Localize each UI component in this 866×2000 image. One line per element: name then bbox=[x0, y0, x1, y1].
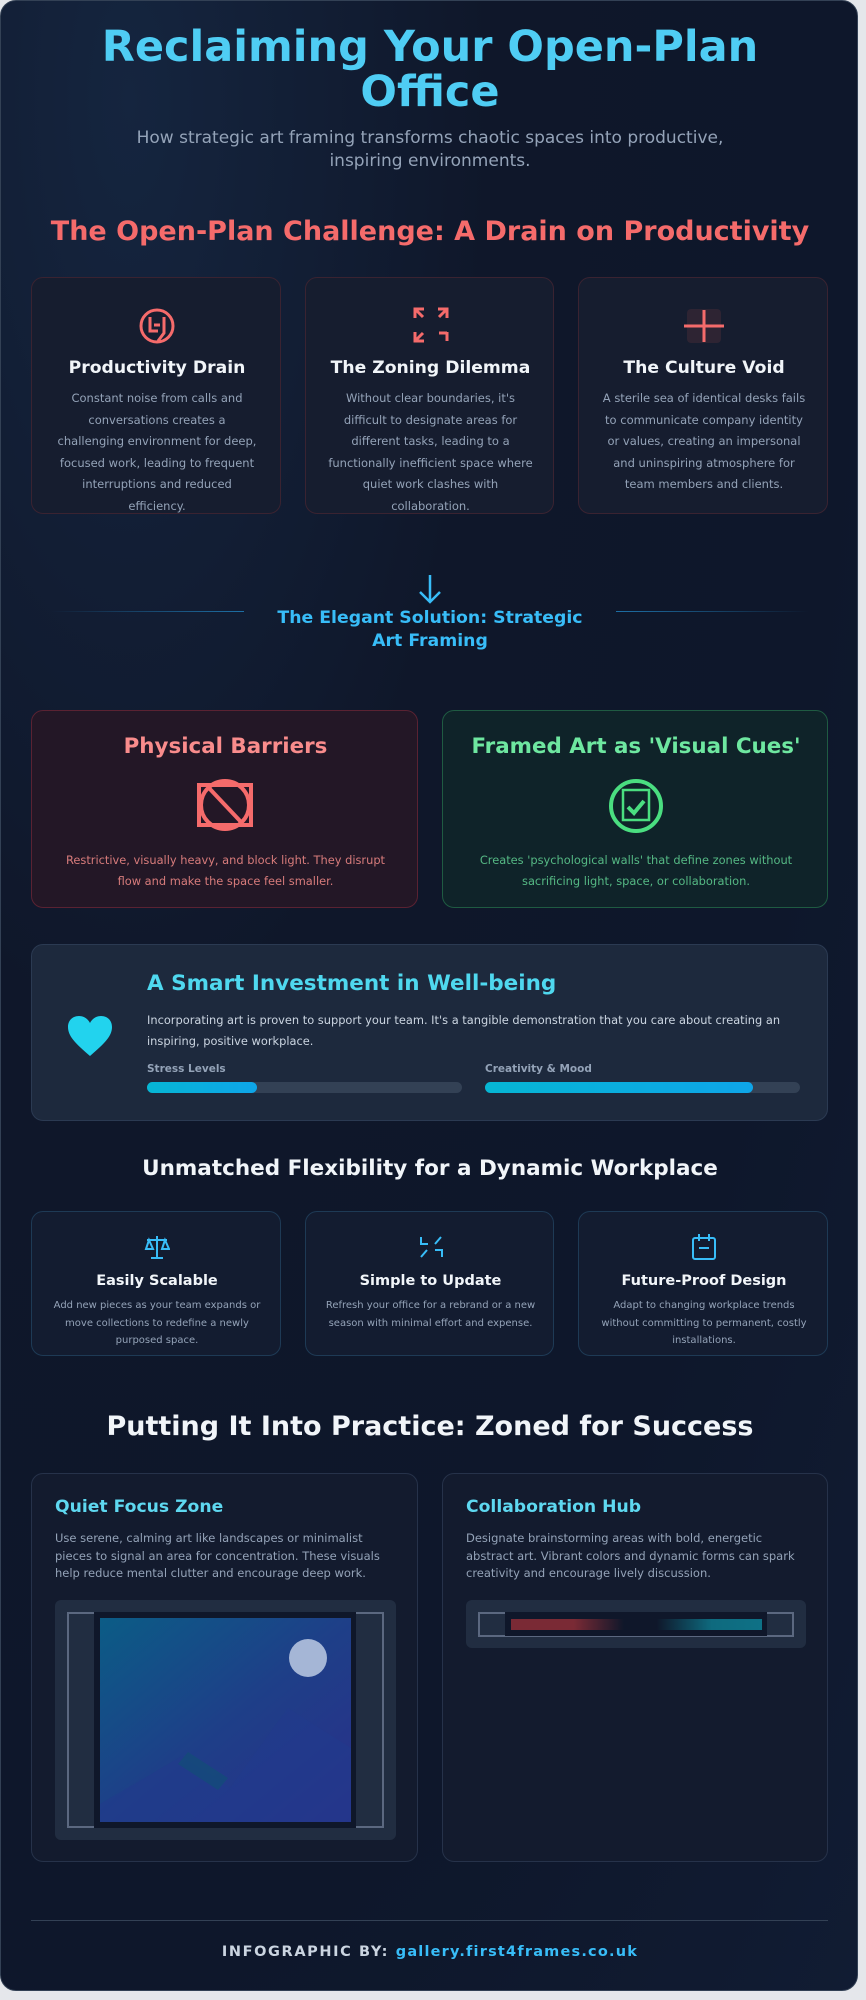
panel: collaboration hub: Collaboration Hub bbox=[466, 1497, 641, 1517]
title: Office bbox=[360, 67, 500, 117]
heading: challenge: The Open-Plan Challenge: A Drain on Productivity bbox=[51, 216, 809, 247]
icon: arrows bbox=[414, 308, 448, 342]
card: productivity drain: Productivity Drain bbox=[69, 358, 245, 378]
panel: well-being: Incorporating art is proven to support your team. It's a tangible demonstration that you care about creating an inspiring, positive workplace. bbox=[147, 1013, 780, 1048]
card: culture void: A sterile sea of identical desks fails to communicate company identity or values, creating an impersonal and uninspiring atmosphere for team members and clients. bbox=[603, 391, 805, 491]
art: landscape bbox=[55, 1600, 396, 1840]
card: productivity drain bbox=[31, 277, 281, 514]
arrow: down bbox=[419, 575, 441, 604]
card: culture void bbox=[578, 277, 828, 514]
icon: heart bbox=[68, 1016, 112, 1056]
panel: framed art: Framed Art as 'Visual Cues' bbox=[471, 734, 801, 759]
panel: collaboration hub: Designate brainstorming areas with bold, energetic abstract art. Vibrant colors and dynamic forms can spark creativity and encourage lively discussion. bbox=[466, 1531, 795, 1580]
panel: framed art bbox=[442, 710, 828, 908]
heading: flexibility: Unmatched Flexibility for a Dynamic Workplace bbox=[142, 1156, 718, 1181]
card: zoning dilemma: The Zoning Dilemma bbox=[331, 358, 530, 378]
bar: creativity: Creativity & Mood bbox=[485, 1063, 592, 1075]
card: update bbox=[305, 1211, 554, 1356]
footer: INFOGRAPHIC BY: gallery.first4frames.co.uk bbox=[222, 1944, 638, 1960]
solution heading: The Elegant Solution: Strategic Art Framing bbox=[277, 608, 583, 651]
title: Reclaiming Your Open-Plan bbox=[102, 22, 758, 72]
card: scalable: Add new pieces as your team expands or move collections to redefine a newly purposed space. bbox=[54, 1300, 260, 1346]
card: productivity drain: Constant noise from calls and conversations creates a challenging environment for deep, focused work, leading to frequent interruptions and reduced efficiency. bbox=[58, 391, 256, 512]
icon: cross bbox=[684, 309, 724, 343]
bar: creativity bbox=[485, 1063, 800, 1093]
panel: physical barriers: Restrictive, visually heavy, and block light. They disrupt flow and make the space feel smaller. bbox=[66, 853, 385, 888]
bar: stress: Stress Levels bbox=[147, 1063, 226, 1075]
icon: framed check bbox=[609, 779, 663, 833]
card: zoning dilemma bbox=[305, 277, 554, 514]
panel: framed art: Creates 'psychological walls' that define zones without sacrificing light, space, or collaboration. bbox=[480, 853, 792, 888]
icon: calendar bbox=[692, 1234, 716, 1260]
panel: collaboration hub bbox=[442, 1473, 828, 1862]
card: zoning dilemma: Without clear boundaries, it's difficult to designate areas for different tasks, leading to a functionally inefficient space where quiet work clashes with collaboration. bbox=[328, 391, 533, 512]
art: abstract strip bbox=[466, 1600, 806, 1648]
panel: quiet focus zone: Quiet Focus Zone bbox=[55, 1497, 223, 1517]
card: culture void: The Culture Void bbox=[623, 358, 785, 378]
icon: blocked bbox=[197, 779, 253, 831]
card: update: Simple to Update bbox=[360, 1273, 501, 1289]
panel: physical barriers bbox=[31, 710, 418, 908]
panel: well-being bbox=[31, 944, 828, 1121]
icon: noise bbox=[140, 308, 174, 344]
card: future proof: Future-Proof Design bbox=[622, 1273, 786, 1289]
card: update: Refresh your office for a rebrand or a new season with minimal effort and expense. bbox=[326, 1300, 535, 1328]
icon: scale bbox=[144, 1236, 170, 1259]
card: future proof: Adapt to changing workplace trends without committing to permanent, costly installations. bbox=[601, 1300, 807, 1346]
bar: stress bbox=[147, 1063, 462, 1093]
panel: quiet focus zone bbox=[31, 1473, 418, 1862]
title bbox=[102, 22, 758, 117]
card: scalable bbox=[31, 1211, 281, 1356]
card: future proof bbox=[578, 1211, 828, 1356]
subtitle: How strategic art framing transforms chaotic spaces into productive, inspiring environments. bbox=[137, 128, 723, 171]
icon: shrink arrows bbox=[420, 1236, 443, 1258]
panel: quiet focus zone: Use serene, calming art like landscapes or minimalist pieces to signal an area for concentration. These visuals help reduce mental clutter and encourage deep work. bbox=[55, 1531, 380, 1580]
heading: practice: Putting It Into Practice: Zoned for Success bbox=[106, 1411, 754, 1442]
panel: well-being: A Smart Investment in Well-being bbox=[147, 971, 556, 996]
card: scalable: Easily Scalable bbox=[96, 1273, 218, 1289]
panel: physical barriers: Physical Barriers bbox=[124, 734, 327, 759]
